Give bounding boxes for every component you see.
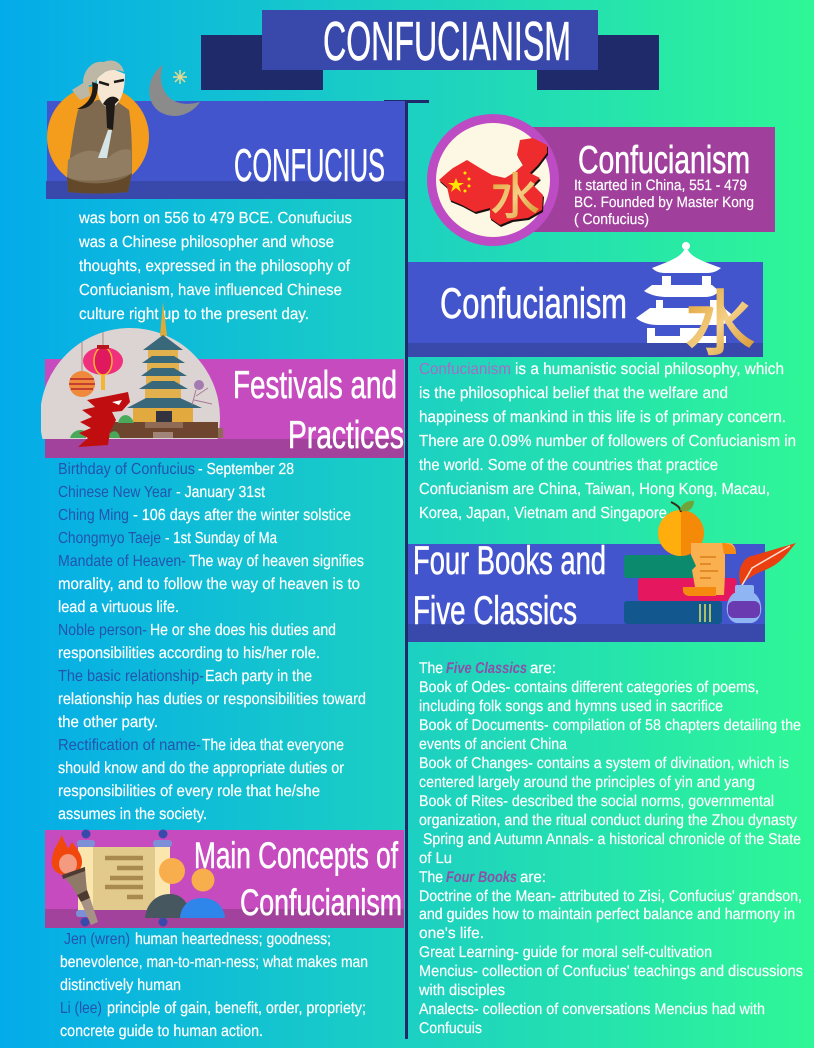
title banner (201, 10, 659, 90)
text block: Five Classics and Four Books: Great Learning- guide for moral self-cultivation (419, 944, 712, 961)
text block: main concepts: principle of gain, benefit, order, propriety; (107, 1000, 366, 1017)
text block: Confucianism description: is the philosophical belief that the welfare and (419, 385, 728, 402)
text block: Confucianism description: Korea, Japan, Vietnam and Singapore. (419, 505, 671, 522)
text block: festivals and practices list: Rectification of name- (58, 737, 201, 754)
text block: Five Classics and Four Books: including folk songs and hymns used in sacrifice (419, 698, 723, 715)
icon: white temple with gold character: 水 (684, 285, 756, 365)
panel: Festivals and Practices banner: Practices (288, 414, 404, 457)
text block: Confucianism description: Confucianism (419, 361, 511, 378)
text block: Five Classics and Four Books: one's life. (419, 925, 484, 942)
text block: festivals and practices list: morality, and to follow the way of heaven is to (58, 576, 360, 593)
panel: Confucianism heading banner: Confucianism (440, 280, 627, 328)
text block: festivals and practices list: The way of heaven signifies (189, 553, 364, 570)
text block: Confucianism description: There are 0.09% number of followers of Confucianism in (419, 433, 796, 450)
text block: festivals and practices list: Chinese New Year (58, 484, 173, 501)
text block: Confucianism description: happiness of mankind in this life is of primary concern. (419, 409, 786, 426)
text block: Five Classics and Four Books: with disciples (418, 982, 505, 999)
text block: festivals and practices list: the other party. (58, 714, 158, 731)
text block: Five Classics and Four Books: are: (530, 660, 556, 677)
panel: Confucianism origin card (530, 127, 775, 232)
text block: Five Classics and Four Books: centered largely around the principles of yin and yang (419, 774, 755, 791)
panel: Four Books and Five Classics banner (408, 539, 765, 642)
text block: main concepts (60, 931, 368, 1040)
text block: Five Classics and Four Books (418, 660, 803, 1037)
text block: festivals and practices list: - 106 days after the winter solstice (133, 507, 351, 524)
text block: Five Classics and Four Books: Book of Odes- contains different categories of poems, (419, 679, 759, 696)
text block: main concepts: Jen (wren) (64, 931, 130, 948)
central vertical divider (384, 100, 429, 1039)
text block: festivals and practices list: The idea that everyone (202, 737, 344, 754)
text block: Confucius biography: was a Chinese philosopher and whose (78, 234, 334, 251)
text block: Five Classics and Four Books: The (419, 869, 443, 886)
text block: Five Classics and Four Books: The (419, 660, 443, 677)
panel: Main Concepts banner: Main Concepts of (194, 835, 399, 876)
text block: festivals and practices list: Each party in the (205, 668, 312, 685)
text block: festivals and practices list: responsibilities of every role that he/she (58, 783, 320, 800)
text block: main concepts: Li (lee) (60, 1000, 102, 1017)
text block: festivals and practices list: Ching Ming (58, 507, 129, 524)
icon: Confucius portrait (47, 60, 149, 193)
panel: Confucius heading banner (46, 101, 405, 199)
panel: Four Books and Five Classics banner: Five Classics (413, 589, 577, 633)
icon: moon and star (149, 65, 200, 116)
text block: festivals and practices list: should know and do the appropriate duties or (58, 760, 345, 777)
panel: Confucianism origin card: Confucianism (578, 139, 750, 182)
panel: Confucianism origin card: It started in China, 551 - 479 (574, 177, 747, 194)
panel: Confucianism origin card: BC. Founded by Master Kong (574, 194, 754, 211)
text block: Confucianism description: Confucianism are China, Taiwan, Hong Kong, Macau, (419, 481, 770, 498)
text block: festivals and practices list: - 1st Sunday of Ma (165, 530, 277, 547)
text block: Five Classics and Four Books: Five Classics (446, 660, 527, 677)
text block: main concepts: benevolence, man-to-man-ness; what makes man (60, 954, 368, 971)
text block: festivals and practices list: lead a virtuous life. (58, 599, 179, 616)
text block: Confucianism description: is a humanistic social philosophy, which (515, 361, 784, 378)
text block: festivals and practices list: Noble person- (58, 622, 147, 639)
icon: white temple with gold character (636, 242, 756, 365)
text block: main concepts: human heartedness; goodness; (135, 931, 331, 948)
panel: Four Books and Five Classics banner: Four Books and (413, 539, 606, 583)
text block: Confucius biography: was born on 556 to 479 BCE. Conufucius (78, 210, 352, 227)
text block: Five Classics and Four Books: are: (520, 869, 546, 886)
text block: festivals and practices list: assumes in the society. (58, 806, 207, 823)
text block: Confucius biography: Confucianism, have influenced Chinese (79, 282, 342, 299)
icon: books, orange, scroll and quill (624, 501, 796, 624)
text block: Five Classics and Four Books: events of ancient China (419, 736, 567, 753)
text block: Five Classics and Four Books: Confucuis (419, 1020, 482, 1037)
text block: festivals and practices list (58, 461, 366, 823)
text block: Confucianism description (419, 361, 796, 522)
panel: Festivals and Practices banner (45, 359, 404, 458)
text block: festivals and practices list: Birthday of Confucius (58, 461, 195, 478)
text block: festivals and practices list: - January 31st (176, 484, 265, 501)
text block: Five Classics and Four Books: Analects- collection of conversations Mencius had with (419, 1001, 765, 1018)
text block: Five Classics and Four Books: Book of Changes- contains a system of divination, which is (419, 755, 789, 772)
text block: festivals and practices list: Chongmyo Taeje (58, 530, 161, 547)
text block: Confucius biography: thoughts, expressed in the philosophy of (79, 258, 351, 275)
panel: Main Concepts banner (45, 830, 404, 928)
text block: Five Classics and Four Books: Book of Rites- described the social norms, governmental (419, 793, 774, 810)
text block: main concepts: distinctively human (60, 977, 181, 994)
text block: main concepts: concrete guide to human action. (60, 1023, 263, 1040)
text block: Confucius biography (78, 210, 352, 323)
icon: China map in circle (427, 114, 559, 246)
text block: festivals and practices list: responsibilities according to his/her role. (58, 645, 320, 662)
text block: festivals and practices list: The basic relationship- (58, 668, 204, 685)
text block: festivals and practices list: He or she does his duties and (150, 622, 336, 639)
icon: scroll, torch and people (52, 830, 225, 926)
icon: festival pagoda, lanterns and dragon (41, 302, 223, 447)
text block: festivals and practices list: relationship has duties or responsibilities toward (58, 691, 366, 708)
icon: China map in circle: 水 (490, 169, 540, 225)
panel: Main Concepts banner: Confucianism (240, 882, 402, 923)
text block: Five Classics and Four Books: Four Books (446, 869, 517, 886)
panel: Confucius heading banner: CONFUCIUS (234, 139, 385, 191)
text block: Confucius biography: culture right up to the present day. (79, 306, 309, 323)
panel: Festivals and Practices banner: Festivals and (233, 364, 397, 407)
text block: festivals and practices list: Mandate of Heaven- (58, 553, 186, 570)
text block: Confucianism description: the world. Some of the countries that practice (419, 457, 718, 474)
panel: Confucianism heading banner (408, 262, 763, 357)
text block: Five Classics and Four Books: of Lu (419, 850, 452, 867)
panel: Confucianism origin card: ( Confucius) (574, 211, 649, 228)
text block: festivals and practices list: - September 28 (198, 461, 294, 478)
title banner: CONFUCIANISM (323, 10, 571, 72)
